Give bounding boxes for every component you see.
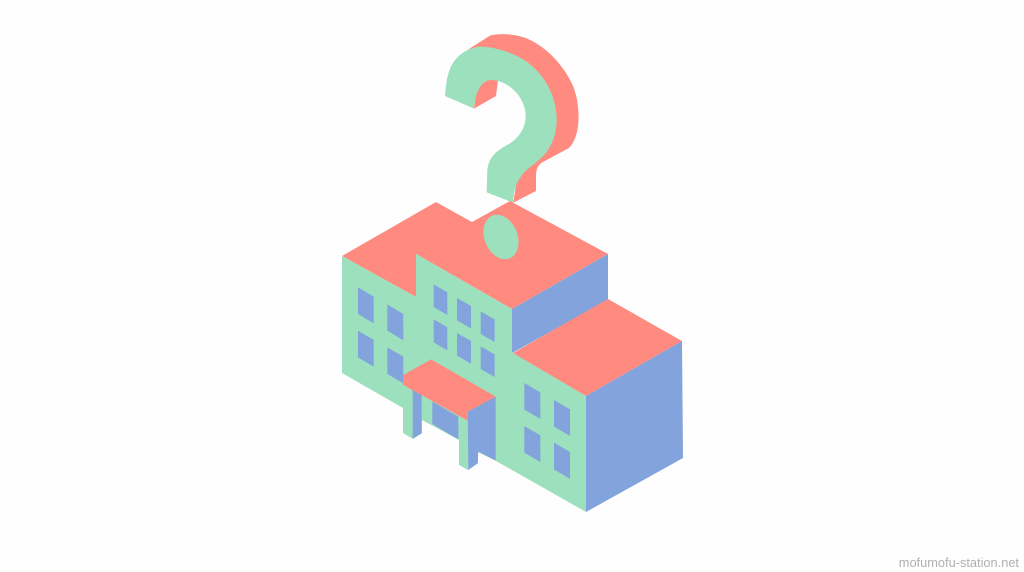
entrance canopy and pillars (403, 359, 496, 470)
left pillar side (413, 388, 422, 439)
icon: question mark dot (477, 209, 525, 265)
entrance door (432, 402, 458, 439)
canopy right wall (468, 397, 496, 470)
watermark: mofumofu-station.net (899, 555, 1019, 570)
icon: question mark (445, 34, 579, 203)
question mark green face (445, 47, 557, 203)
windows: left wing (358, 287, 403, 383)
windows: right block (524, 383, 570, 479)
canopy roof (403, 359, 496, 421)
building (342, 201, 683, 512)
side block roof (513, 299, 682, 396)
question mark inner hook extrusion (474, 79, 498, 109)
upper right wall (512, 254, 608, 353)
question mark red extrusion (468, 34, 579, 203)
green front walls (342, 254, 586, 512)
main roof (342, 201, 608, 309)
side block right wall (586, 341, 683, 512)
windows: centre wing (434, 284, 495, 377)
